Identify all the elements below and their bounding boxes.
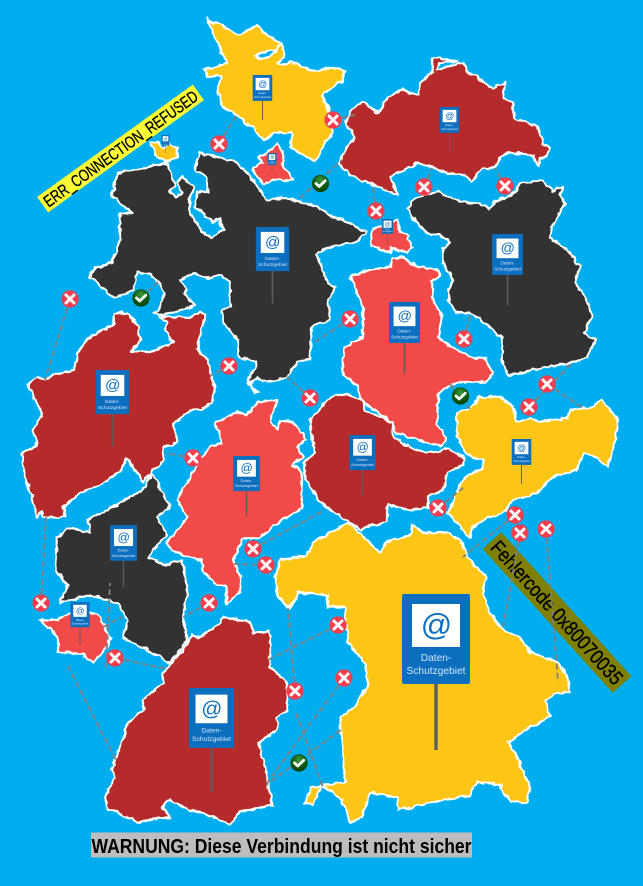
state: Saarland — [40, 602, 110, 662]
banner: ERR_CONNECTION_REFUSED — [37, 85, 204, 213]
state: Niedersachsen — [90, 153, 366, 393]
sign: Hessen — [233, 456, 260, 517]
sign: Saarland: Daten- — [76, 618, 84, 622]
icon: error marker — [496, 177, 514, 195]
icon: error marker — [324, 111, 342, 129]
sign: Saarland — [70, 602, 90, 646]
sign: Bremen: @ — [164, 137, 168, 141]
sign: Hessen: Daten- — [241, 478, 253, 483]
sign: Berlin: @ — [385, 222, 390, 228]
sign: Sachsen — [512, 439, 531, 484]
sign: Mecklenburg-Vorpommern: @ — [445, 111, 454, 121]
icon: check marker — [133, 290, 149, 306]
sign: Rheinland-Pfalz — [110, 525, 137, 587]
icon: error marker — [32, 594, 50, 612]
icon: error marker — [455, 330, 473, 348]
sign: Niedersachsen: @ — [265, 234, 280, 251]
sign: Hamburg: @ — [270, 154, 274, 159]
sign: Mecklenburg-Vorpommern: Daten- — [445, 123, 454, 127]
icon: error marker — [329, 616, 347, 634]
state: Sachsen-Anhalt — [342, 257, 493, 445]
sign: Mecklenburg-Vorpommern — [440, 107, 459, 152]
sign: Thueringen: Daten- — [357, 457, 369, 462]
icon: check marker — [291, 755, 307, 771]
icon: error marker — [210, 135, 228, 153]
icon: error marker — [537, 520, 555, 538]
state: Berlin — [370, 219, 412, 253]
sign: Rheinland-Pfalz: Schutzgebiet — [112, 553, 136, 558]
sign: Thueringen — [349, 435, 376, 496]
sign: Bayern: Schutzgebiet — [407, 666, 466, 677]
sign: Schleswig-Holstein: Schutzgebiet — [254, 95, 271, 99]
state: Sachsen — [448, 397, 618, 538]
banner: ERR_CONNECTION_REFUSED: ERR_CONNECTION_REFUSED — [40, 88, 202, 211]
icon: check marker — [312, 175, 329, 192]
success markers — [133, 175, 469, 771]
sign: Brandenburg: Daten- — [501, 261, 515, 266]
icon: error marker — [200, 594, 218, 612]
sign: Sachsen: @ — [517, 443, 526, 453]
sign: Mecklenburg-Vorpommern: Schutzgebiet — [441, 127, 458, 131]
sign: Baden-Wuerttemberg: Daten- — [201, 728, 222, 735]
icon: error marker — [244, 540, 262, 558]
sign: Brandenburg — [492, 234, 523, 305]
sign: Niedersachsen: Schutzgebiet — [258, 262, 288, 268]
icon: check marker — [452, 388, 469, 404]
error markers — [32, 111, 556, 700]
icon: error marker — [106, 649, 124, 667]
sign: Hamburg — [268, 153, 276, 174]
icon: error marker — [506, 506, 524, 524]
sign: Sachsen-Anhalt: Daten- — [398, 329, 412, 334]
sign: Sachsen-Anhalt: @ — [397, 308, 412, 324]
state: Schleswig-Holstein — [205, 18, 345, 162]
icon: error marker — [429, 499, 447, 517]
icon: error marker — [341, 310, 359, 328]
sign: Baden-Wuerttemberg: Schutzgebiet — [192, 736, 231, 743]
icon: error marker — [286, 682, 304, 700]
sign: Berlin: Schutzgebiet — [383, 230, 393, 233]
sign: Nordrhein-Westfalen: Daten- — [105, 399, 120, 405]
sign: Bayern: Daten- — [421, 653, 451, 664]
sign: Schleswig-Holstein: @ — [258, 79, 267, 89]
sign: Sachsen-Anhalt: Schutzgebiet — [391, 334, 419, 339]
icon: error marker — [257, 556, 275, 574]
sign: Sachsen-Anhalt — [389, 302, 420, 373]
state: Bremen — [150, 135, 178, 162]
sign: Sachsen: Daten- — [517, 455, 526, 459]
connector lines — [41, 115, 583, 787]
sign: Thueringen: Schutzgebiet — [351, 462, 375, 467]
sign: Schleswig-Holstein — [253, 75, 272, 120]
state: Thueringen — [305, 395, 465, 530]
sign: Hamburg: Schutzgebiet — [268, 162, 276, 165]
sign: Sachsen: Schutzgebiet — [513, 459, 530, 463]
icon: error marker — [367, 202, 385, 220]
icon: error marker — [538, 375, 556, 393]
icon: error marker — [184, 449, 202, 467]
sign: Baden-Wuerttemberg — [189, 688, 234, 792]
state: Baden-Wuerttemberg — [105, 617, 288, 825]
state: Hessen — [167, 400, 307, 605]
state: Nordrhein-Westfalen — [22, 312, 215, 517]
sign: Thueringen: @ — [356, 440, 369, 454]
sign: Nordrhein-Westfalen — [96, 370, 129, 446]
state: Bayern — [275, 523, 570, 823]
icon: error marker — [61, 290, 79, 308]
sign: Bremen: Schutzgebiet — [162, 142, 170, 145]
state: Brandenburg — [408, 180, 595, 375]
sign: Nordrhein-Westfalen: Schutzgebiet — [98, 405, 128, 411]
icon: error marker — [511, 524, 529, 542]
state: Rheinland-Pfalz — [55, 473, 188, 663]
sign: Rheinland-Pfalz: @ — [117, 530, 130, 544]
state: Mecklenburg-Vorpommern — [338, 58, 550, 195]
warning banner: WARNUNG: Diese Verbindung ist nicht sicher — [92, 836, 472, 858]
sign: Bremen — [161, 135, 170, 153]
sign: Niedersachsen — [256, 227, 289, 303]
sign: Berlin: Daten- — [385, 228, 390, 231]
sign: Hamburg: Daten- — [270, 160, 275, 163]
sign: Rheinland-Pfalz: Daten- — [117, 548, 130, 553]
sign: Schleswig-Holstein: Daten- — [258, 91, 267, 95]
sign: Bremen: Daten- — [164, 141, 168, 144]
sign: Saarland: Schutzgebiet — [72, 621, 88, 625]
icon: error marker — [301, 389, 319, 407]
sign: Baden-Wuerttemberg: @ — [201, 697, 222, 720]
sign: Berlin — [382, 219, 393, 245]
state: Hamburg — [252, 143, 293, 185]
sign: Bayern — [402, 594, 470, 750]
sign: Bayern: @ — [420, 607, 452, 642]
sign: Nordrhein-Westfalen: @ — [105, 377, 120, 394]
sign: Hessen: @ — [240, 461, 253, 475]
icon: error marker — [520, 398, 538, 416]
banner: Fehlercode: Fehlercode 0x80070035 — [486, 537, 627, 690]
icon: error marker — [220, 357, 238, 375]
sign: Hessen: Schutzgebiet — [235, 483, 259, 488]
icon: error marker — [415, 178, 433, 196]
sign: Niedersachsen: Daten- — [265, 256, 280, 262]
sign: Saarland: @ — [76, 605, 85, 615]
sign: Brandenburg: Schutzgebiet — [494, 266, 522, 271]
icon: error marker — [335, 669, 353, 687]
sign: Brandenburg: @ — [500, 240, 515, 256]
